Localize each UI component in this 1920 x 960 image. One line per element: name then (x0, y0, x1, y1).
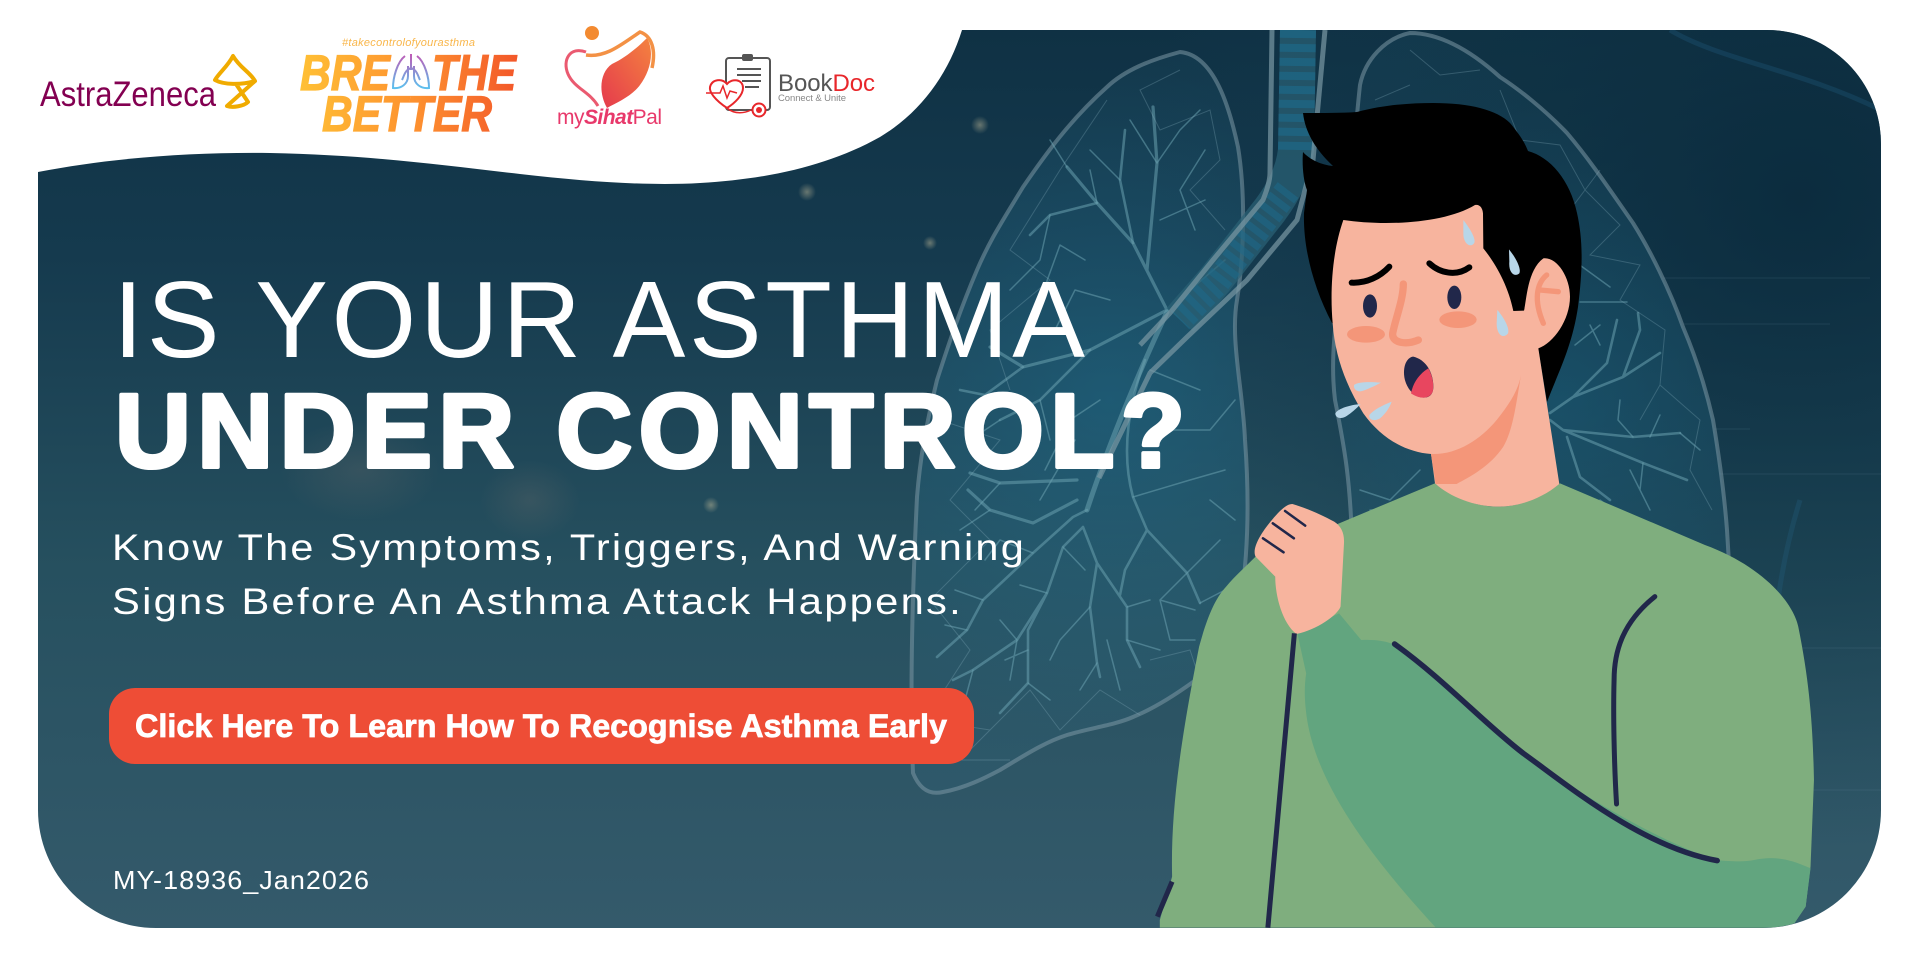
mouth (1404, 357, 1433, 398)
title: IS YOUR ASTHMA (113, 259, 1085, 381)
logo: BookDoc: Connect & Unite (778, 93, 846, 104)
reference code: MY-18936_Jan2026 (113, 865, 370, 895)
neck shadow (1431, 375, 1521, 484)
lung: left (912, 52, 1248, 793)
logo: Breathe Better: THE (432, 45, 517, 101)
call-to-action button (109, 688, 974, 764)
hair (1303, 103, 1582, 402)
body outlines (1157, 511, 1717, 928)
logo: Breathe Better: BETTER (322, 86, 492, 142)
subtitle: Know The Symptoms, Triggers, And Warning (112, 527, 1026, 568)
hand (1255, 504, 1344, 634)
logo: Breathe Better: BRE (300, 45, 391, 101)
logo: BookDoc: BookDoc (778, 70, 875, 97)
logo: mySihatPal (557, 26, 662, 129)
subtitle (112, 527, 1026, 622)
lung: right (1331, 31, 1730, 556)
illustration: coughing man (1157, 103, 1814, 928)
subtitle: Signs Before An Asthma Attack Happens. (112, 581, 963, 622)
title: UNDER CONTROL? (115, 373, 1185, 490)
eyebrows (1352, 263, 1469, 283)
ear detail (1537, 275, 1558, 323)
eyes (1363, 286, 1461, 318)
call-to-action button: Click Here To Learn How To Recognise Asthma Early (135, 708, 947, 744)
logo: AstraZeneca (40, 56, 255, 114)
sleeve: raised arm (1297, 613, 1811, 928)
logo: Breathe Better: #takecontrolofyourasthma (342, 37, 475, 49)
logo: AstraZeneca: AstraZeneca (40, 75, 216, 114)
lungs illustration (912, 30, 1732, 793)
logo: mySihatPal: mySihatPal (557, 106, 662, 129)
face and neck (1332, 205, 1570, 507)
logo: Breathe Better (300, 37, 517, 142)
logo: BookDoc (706, 54, 875, 116)
nose (1393, 284, 1418, 343)
title (113, 259, 1185, 490)
sweat and cough droplets (1335, 220, 1520, 420)
cheeks (1347, 311, 1477, 343)
trachea and bronchi (1099, 30, 1325, 478)
body: sweater (1160, 483, 1814, 928)
